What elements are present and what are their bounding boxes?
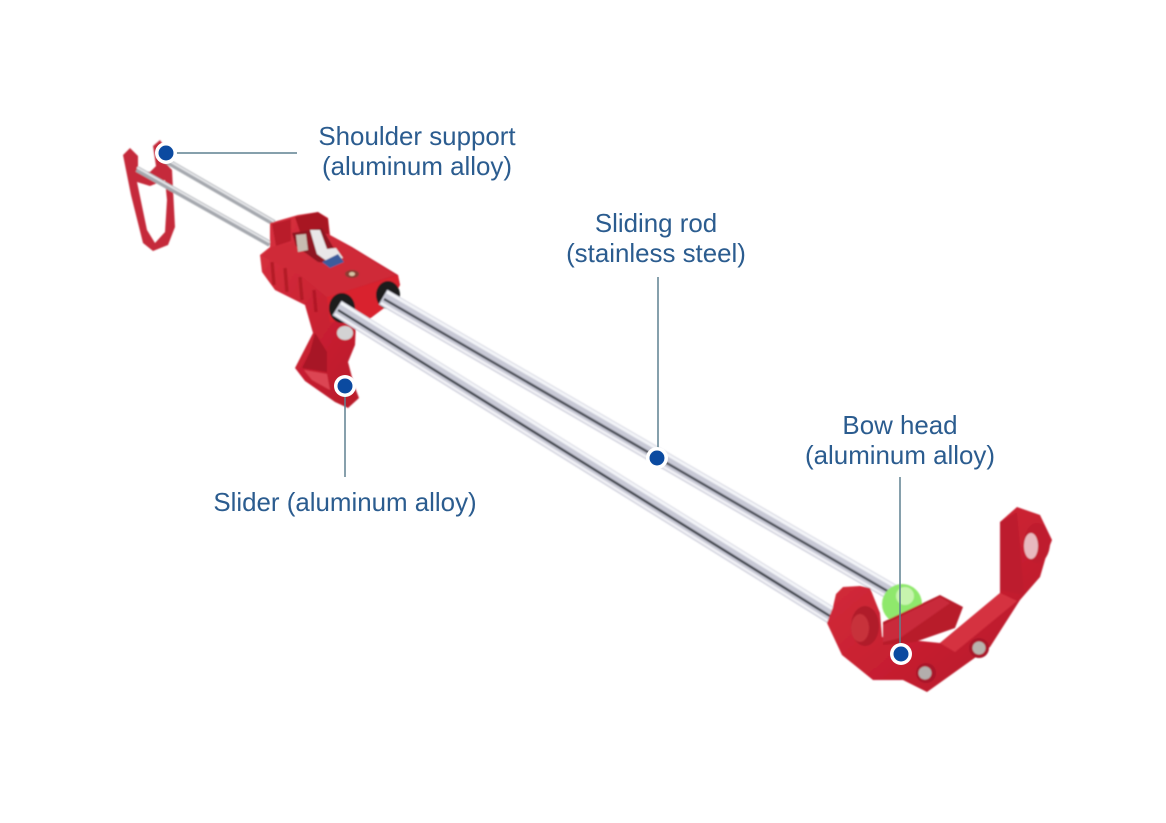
thin rods [137, 158, 274, 244]
callout: bow head: (aluminum alloy) [805, 442, 995, 470]
sight and lever [310, 230, 343, 262]
callout: shoulder support [155, 123, 516, 181]
grip button [337, 326, 353, 340]
grip window [302, 333, 327, 372]
callout: slider: Slider (aluminum alloy) [213, 489, 477, 517]
product: sliding bow [123, 140, 1052, 692]
sliding rods [335, 292, 899, 622]
callout: bow head: Bow head [842, 412, 958, 440]
callout: sliding rod: Sliding rod [595, 210, 717, 238]
callout: shoulder support: Shoulder support [318, 123, 516, 151]
front face [327, 275, 400, 322]
rod sockets [329, 293, 355, 323]
shoulder support [123, 140, 175, 251]
sight bracket [272, 219, 291, 246]
top face [262, 236, 396, 297]
bow head [827, 507, 1052, 692]
green level bubble [882, 584, 922, 624]
callout: bow head [805, 412, 995, 665]
slider body and grip [260, 212, 400, 408]
screws [916, 663, 936, 683]
callout: sliding rod: (stainless steel) [566, 240, 746, 268]
callout: shoulder support: (aluminum alloy) [322, 153, 512, 181]
callout: sliding rod [566, 210, 746, 469]
ribs [272, 262, 316, 312]
callout: slider [213, 375, 477, 517]
